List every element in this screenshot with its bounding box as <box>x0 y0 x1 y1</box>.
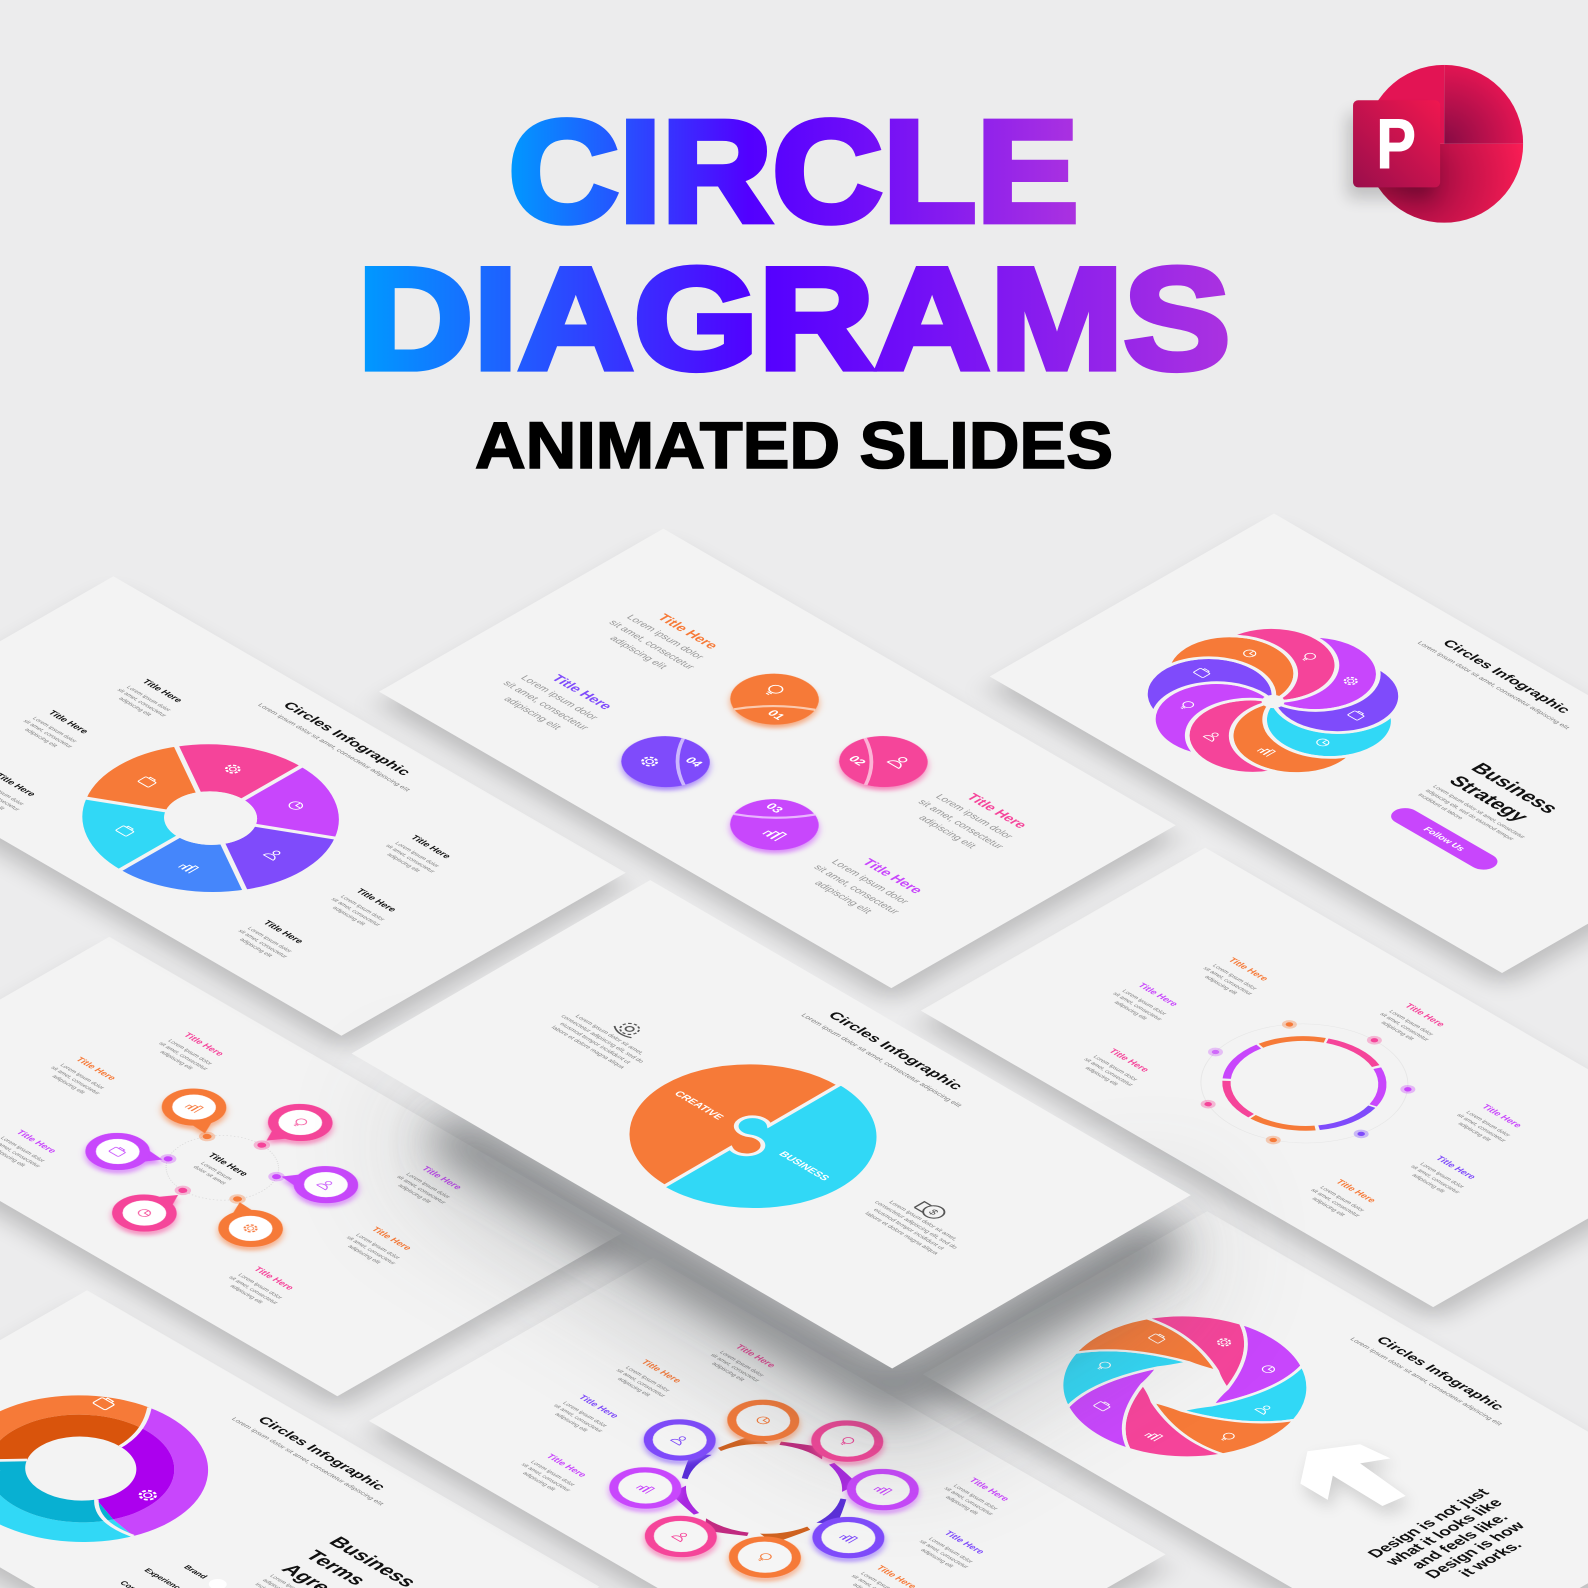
body text: incididunt ut labore <box>1416 793 1464 821</box>
label <box>1302 1175 1384 1222</box>
label: Title Here <box>576 1394 621 1419</box>
cast shadow of centre slide <box>405 1104 1195 1438</box>
label <box>42 1053 124 1100</box>
label <box>593 601 729 679</box>
slide: donut with three segments <box>0 1290 612 1588</box>
label: adipiscing elit <box>1112 1000 1148 1021</box>
label: Lorem ipsum dolor <box>1120 989 1167 1016</box>
label: sit amet, consectetur <box>614 1368 666 1398</box>
rings <box>552 1367 976 1588</box>
label: Title Here <box>942 1529 987 1555</box>
label: Lorem ipsum dolor <box>624 614 706 661</box>
ring dots <box>1156 994 1460 1169</box>
label: adipiscing elit <box>1083 1066 1119 1087</box>
label: sit amet, consectetur <box>519 1463 571 1493</box>
note right: Lorem ipsum dolor sit amet, <box>887 1200 959 1242</box>
circle 03: 03 <box>763 801 787 815</box>
label: sit amet, consectetur <box>329 897 381 927</box>
label: Lorem ipsum dolor <box>1418 1162 1465 1189</box>
ring dots <box>136 1118 308 1217</box>
label: adipiscing elit <box>710 1362 746 1382</box>
title: diagrams: DIAGRAMS <box>358 238 1230 400</box>
note right <box>858 1196 967 1259</box>
label: sit amet, consectetur <box>1082 1057 1134 1087</box>
label: Title Here <box>14 1129 59 1154</box>
label: adipiscing elit <box>811 879 874 916</box>
icon: powerpoint logo: P <box>1376 105 1416 184</box>
note right: consectetur adipiscing elit, sed do <box>873 1200 959 1250</box>
label: Title Here <box>1433 1155 1478 1180</box>
label: Title Here <box>369 1226 414 1251</box>
label: Lorem ipsum dolor <box>1211 964 1258 991</box>
note left: consectetur adipiscing elit, sed do <box>559 1014 646 1064</box>
label <box>14 706 96 753</box>
arrow <box>1300 1444 1410 1514</box>
icon: gear in hand <box>611 1019 645 1039</box>
business strategy heading: Strategy <box>1444 773 1534 825</box>
body text: adipiscing elit, sed do eiusmod tempor <box>1423 789 1515 842</box>
label <box>607 1355 689 1402</box>
label: adipiscing elit <box>1379 1021 1415 1041</box>
business terms heading: Terms <box>300 1548 371 1588</box>
subheading: Lorem ipsum dolor sit amet, consectetur adipiscing elit <box>256 703 411 793</box>
label: sit amet, consectetur <box>395 1175 447 1205</box>
pin: pink <box>248 1101 338 1152</box>
label: Lorem ipsum dolor <box>166 1039 213 1066</box>
label: sit amet, consectetur <box>227 1276 279 1306</box>
label: Title Here <box>419 1165 464 1191</box>
label <box>902 780 1038 859</box>
slide: four numbered circles <box>367 529 1188 1002</box>
label: Title Here <box>74 1056 118 1082</box>
icon: coin <box>913 1200 949 1221</box>
centre label: Lorem ipsum <box>199 1162 233 1182</box>
title: circle: CIRCLE <box>508 90 1079 252</box>
petal icons <box>1143 629 1399 776</box>
subheading: Lorem ipsum dolor sit amet, consectetur adipiscing elit <box>229 1417 385 1507</box>
slide: shutter diagram <box>911 1211 1588 1588</box>
label: Lorem ipsum dolor <box>393 841 440 869</box>
label: sit amet, consectetur <box>811 864 902 916</box>
label: adipiscing elit <box>346 1244 382 1265</box>
label <box>377 831 459 878</box>
ring segments <box>1149 994 1460 1173</box>
circle 02 <box>821 726 946 798</box>
label: sit amet, consectetur <box>345 1236 396 1266</box>
label: Lorem ipsum dolor <box>828 858 911 906</box>
label: sit amet, consectetur <box>606 619 697 672</box>
puzzle chart: CREATIVE <box>671 1090 725 1122</box>
label: Lorem ipsum dolor <box>404 1172 451 1200</box>
centre label <box>188 1152 251 1187</box>
label <box>797 845 934 924</box>
label: sit amet, consectetur <box>942 1487 994 1517</box>
label: sit amet, consectetur <box>115 688 167 718</box>
slide: segmented wheel <box>0 576 638 1050</box>
quote: it works. <box>1456 1539 1526 1579</box>
label <box>1402 1152 1484 1199</box>
label: Title Here <box>548 673 616 712</box>
label: sit amet, consectetur <box>500 680 591 732</box>
label <box>1448 1100 1530 1147</box>
label: adipiscing elit <box>50 1074 86 1095</box>
label: adipiscing elit <box>1410 1173 1446 1194</box>
pin: magenta <box>269 1155 364 1209</box>
label: adipiscing elit <box>117 697 152 717</box>
heading: Circles Infographic <box>280 700 415 778</box>
label: Title Here <box>544 1453 589 1478</box>
label: Lorem ipsum dolor <box>518 674 601 722</box>
dashed ring <box>143 1122 302 1214</box>
label: Lorem ipsum dolor <box>1387 1010 1434 1037</box>
label <box>911 1526 992 1573</box>
label: Title Here <box>181 1031 226 1057</box>
label <box>108 675 190 722</box>
label: Title Here <box>46 709 91 735</box>
label: Title Here <box>654 612 722 651</box>
label: adipiscing elit <box>916 814 978 850</box>
label: Lorem ipsum dolor <box>1464 1111 1511 1138</box>
label <box>1371 999 1453 1046</box>
label: adipiscing elit <box>607 635 669 671</box>
label: Title Here <box>408 834 453 860</box>
circle 01 <box>712 663 837 735</box>
flower petals <box>1071 588 1469 817</box>
label: Lorem ipsum dolor <box>951 1484 999 1511</box>
label: Lorem ipsum dolor <box>338 895 386 922</box>
label: Title Here <box>967 1476 1012 1502</box>
label: sit amet, consectetur <box>157 1041 209 1071</box>
label: Lorem ipsum dolor <box>236 1273 283 1300</box>
note left: Lorem ipsum dolor sit amet, <box>573 1014 645 1056</box>
label: adipiscing elit <box>228 1284 264 1305</box>
label: Lorem ipsum dolor <box>933 793 1015 841</box>
button: Follow Us <box>1421 826 1467 852</box>
label: adipiscing elit <box>1203 975 1238 996</box>
progress labels: Brand <box>182 1564 210 1580</box>
label: Lorem ipsum dolor <box>1091 1055 1138 1082</box>
quote <box>1365 1486 1556 1588</box>
ring icons <box>588 1387 941 1588</box>
label: Title Here <box>859 857 927 896</box>
label <box>388 1162 470 1209</box>
label: adipiscing elit <box>331 906 366 927</box>
outer thin circle <box>1158 999 1451 1168</box>
label: Lorem ipsum dolor <box>927 1537 974 1564</box>
label: adipiscing elit <box>1456 1122 1492 1142</box>
ring links <box>625 1408 904 1569</box>
quote: and feels like. <box>1408 1511 1512 1571</box>
business strategy heading: Business <box>1466 760 1563 817</box>
label: Title Here <box>1480 1103 1524 1129</box>
label: sit amet, consectetur <box>1455 1113 1507 1143</box>
label: adipiscing elit <box>238 938 273 958</box>
subheading: Lorem ipsum dolor sit amet, consectetur adipiscing elit <box>1348 1337 1504 1427</box>
label: sit amet, consectetur <box>384 844 436 874</box>
quote: Design is not just <box>1365 1486 1494 1560</box>
slide: two piece puzzle circle <box>352 880 1191 1368</box>
note right: labore et dolore magna aliqua <box>863 1211 940 1256</box>
label: Title Here <box>1136 982 1180 1008</box>
note left: eiusmod tempor incididunt ut <box>558 1022 632 1065</box>
centre label: dolor sit amet <box>191 1165 227 1186</box>
label: sit amet, consectetur <box>708 1353 760 1383</box>
label <box>487 661 623 740</box>
label: sit amet, consectetur <box>1111 992 1163 1022</box>
heading: Circles Infographic <box>824 1010 966 1092</box>
label: sit amet, consectetur <box>1309 1188 1361 1218</box>
label: Title Here <box>1334 1178 1378 1204</box>
label: Title Here <box>354 887 399 913</box>
donut chart <box>0 1365 261 1572</box>
heading: Circles Infographic <box>1439 638 1575 716</box>
blade icons <box>1060 1315 1316 1462</box>
wheel chart <box>31 715 390 922</box>
label: sit amet, consectetur <box>552 1404 603 1434</box>
heading: Circles Infographic <box>255 1414 390 1492</box>
label <box>935 1473 1017 1521</box>
label: Lorem ipsum dolor <box>1318 1186 1365 1213</box>
label <box>0 769 43 816</box>
label <box>338 1223 419 1270</box>
label <box>1104 979 1186 1026</box>
circle 03 <box>712 789 837 861</box>
label: adipiscing elit <box>396 1184 432 1204</box>
quote: Design is how <box>1422 1519 1529 1581</box>
icon: powerpoint logo <box>1347 65 1523 223</box>
label: Lorem ipsum dolor <box>58 1063 105 1090</box>
label: sit amet, consectetur <box>49 1066 101 1096</box>
slide: nine petal flower <box>978 513 1588 987</box>
label: sit amet, consectetur <box>1409 1165 1461 1195</box>
label: Lorem ipsum dolor <box>561 1401 608 1428</box>
label: Title Here <box>733 1343 778 1369</box>
label: Title Here <box>140 678 185 704</box>
label <box>1075 1044 1157 1091</box>
slide: segmented ring <box>909 848 1588 1321</box>
label: Title Here <box>261 919 306 945</box>
quote: what it looks like <box>1382 1497 1507 1569</box>
subtitle: ANIMATED SLIDES <box>475 408 1113 482</box>
shutter blades <box>1001 1280 1369 1492</box>
subheading: Lorem ipsum dolor sit amet, consectetur adipiscing elit <box>1415 640 1571 731</box>
label: adipiscing elit <box>521 1471 557 1492</box>
label: Title Here <box>1226 956 1271 982</box>
note left <box>545 1010 653 1073</box>
circle 04 <box>603 726 728 798</box>
label: Lorem ipsum dolor <box>125 685 172 713</box>
progress labels <box>118 1552 230 1588</box>
label: Title Here <box>1403 1002 1447 1028</box>
label: adipiscing elit <box>158 1050 194 1071</box>
label: adipiscing elit <box>616 1377 651 1398</box>
label: sit amet, consectetur <box>236 929 288 959</box>
label: Title Here <box>251 1265 296 1291</box>
centre label: Title Here <box>206 1152 251 1177</box>
slide: chain of eight rings <box>357 1258 1178 1588</box>
label: Title Here <box>963 791 1031 831</box>
label: Lorem ipsum dolor <box>529 1460 576 1487</box>
label: Lorem ipsum dolor <box>31 717 78 744</box>
label: Title Here <box>639 1358 684 1384</box>
label: sit amet, consectetur <box>917 1540 969 1570</box>
label <box>702 1340 783 1387</box>
label: adipiscing elit <box>944 1495 979 1516</box>
subheading: Lorem ipsum dolor sit amet, consectetur adipiscing elit <box>799 1013 963 1108</box>
label: adipiscing elit <box>1310 1197 1346 1218</box>
label: Lorem ipsum dolor <box>354 1233 401 1260</box>
label: Lorem ipsum dolor <box>246 927 293 954</box>
heading: Circles Infographic <box>1373 1334 1508 1413</box>
pin: orange <box>199 1196 293 1250</box>
label: adipiscing elit <box>919 1548 955 1569</box>
puzzle chart: BUSINESS <box>776 1150 831 1183</box>
circle 01: 01 <box>764 708 788 722</box>
label: adipiscing elit <box>385 853 421 873</box>
label: adipiscing elit <box>501 695 563 731</box>
circle 04: 04 <box>682 755 706 769</box>
label <box>843 1561 924 1588</box>
pin: orange <box>151 1085 246 1140</box>
label: Lorem ipsum dolor <box>718 1351 765 1378</box>
label: adipiscing elit <box>553 1412 589 1433</box>
label <box>545 1391 626 1438</box>
label: sit amet, consectetur <box>915 798 1006 851</box>
label <box>1194 953 1276 1000</box>
label <box>150 1028 232 1075</box>
label <box>220 1262 302 1309</box>
button <box>1385 805 1503 873</box>
pin: pink <box>106 1183 196 1235</box>
slide: callout pins <box>0 937 634 1410</box>
pin: magenta <box>80 1127 174 1181</box>
label: Title Here <box>1107 1047 1152 1073</box>
label <box>229 916 311 963</box>
label: sit amet, consectetur <box>1378 1012 1430 1042</box>
label: adipiscing elit <box>23 728 58 748</box>
label: sit amet, consectetur <box>21 719 73 749</box>
puzzle chart <box>575 1033 928 1238</box>
label: sit amet, consectetur <box>1201 966 1253 996</box>
label <box>322 884 404 931</box>
body text: Lorem ipsum dolor sit amet, consectetur <box>1431 785 1526 840</box>
circle 02: 02 <box>845 754 869 768</box>
note left: labore et dolore magna aliqua <box>549 1025 627 1070</box>
label: Lorem ipsum dolor <box>623 1366 671 1393</box>
icon: coin: $ <box>925 1208 941 1217</box>
label <box>513 1450 594 1497</box>
label <box>0 1126 64 1173</box>
note right: eiusmod tempor incididunt ut <box>871 1208 946 1251</box>
